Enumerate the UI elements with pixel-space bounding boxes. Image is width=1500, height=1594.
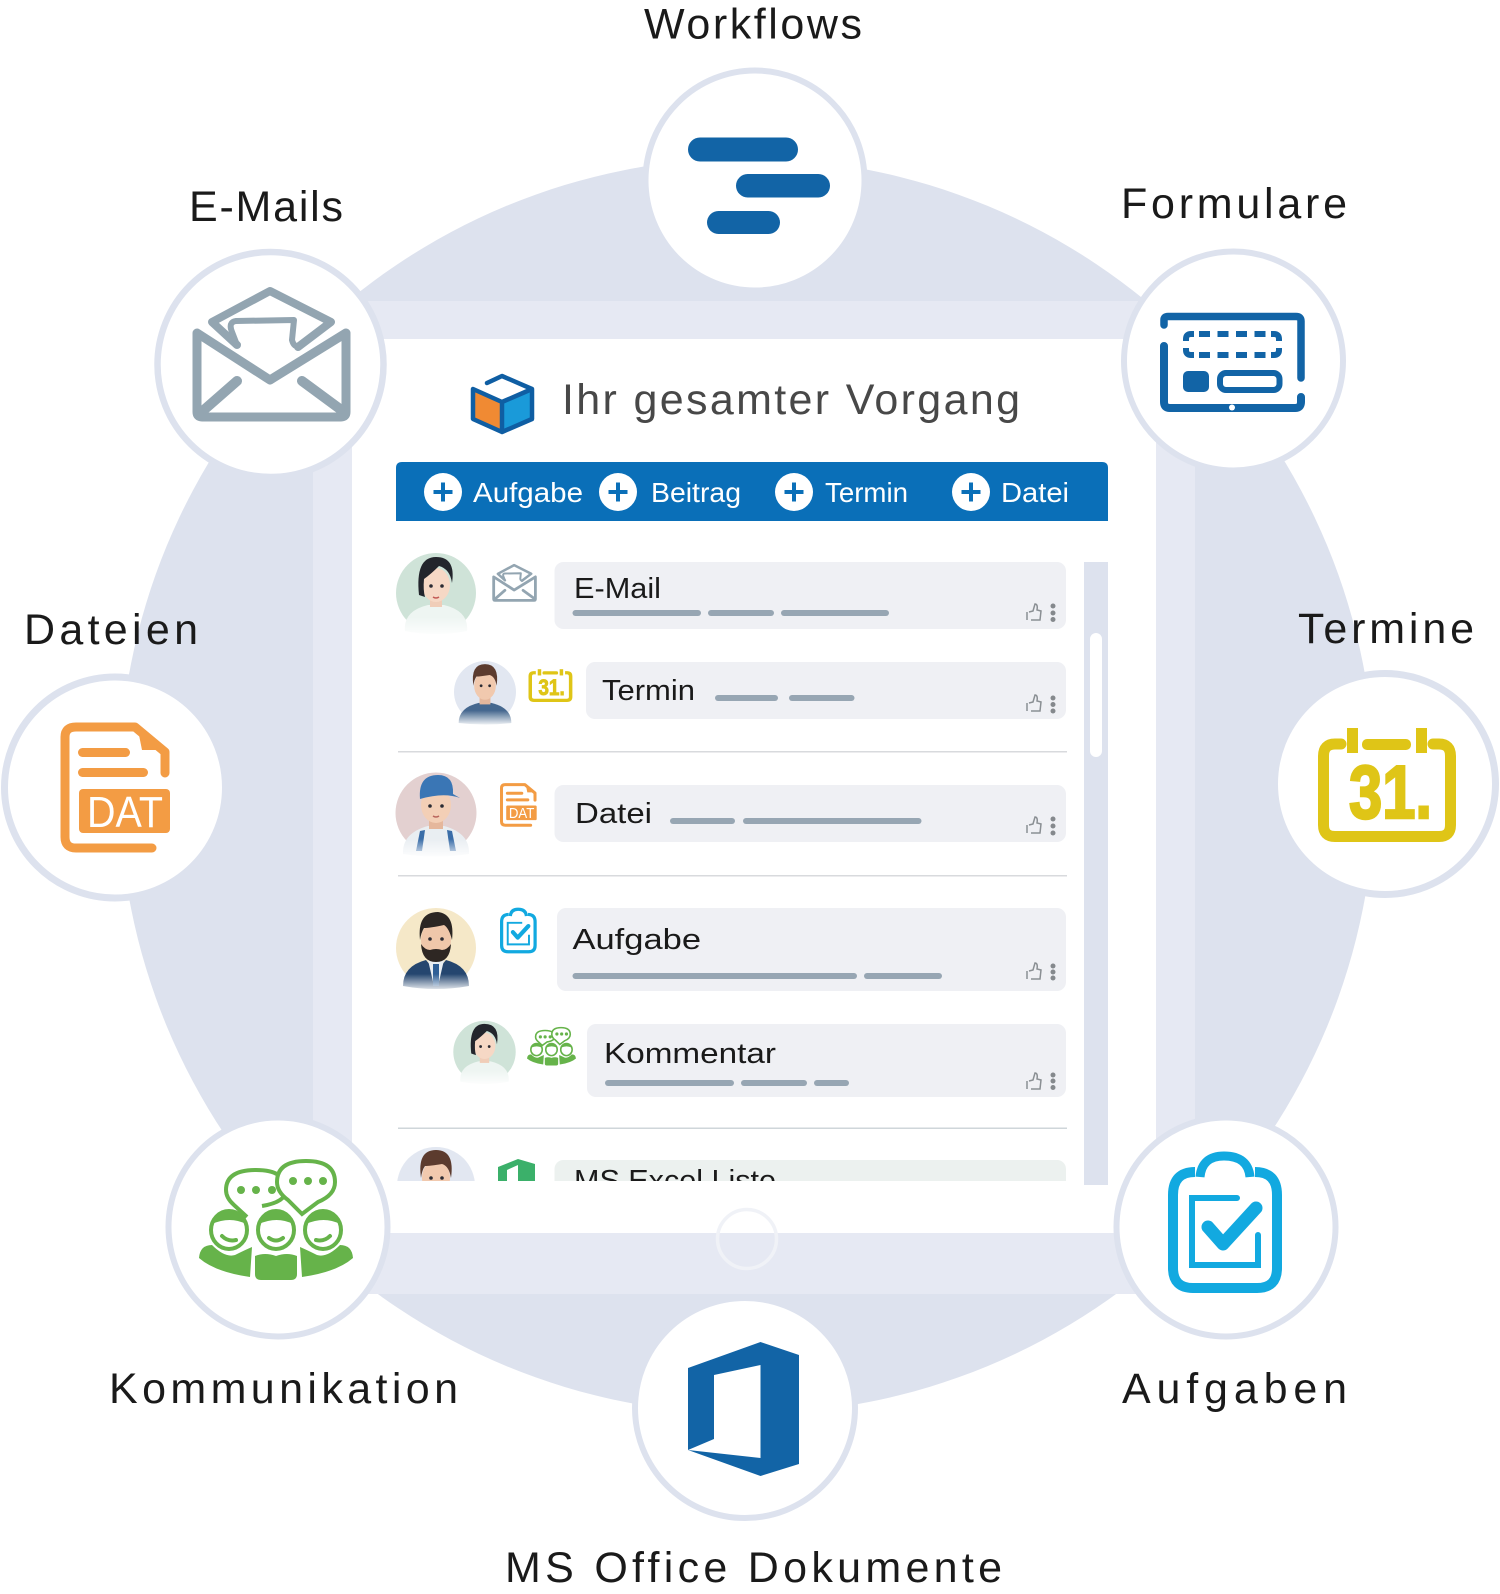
tablet device bbox=[313, 301, 1195, 1294]
button: Beitrag: Beitrag bbox=[651, 477, 741, 508]
icon: calendar: 31. bbox=[1349, 750, 1432, 834]
icon: DAT file: DAT bbox=[87, 788, 163, 837]
icon: thumb and menu bbox=[1027, 1072, 1056, 1090]
app heading bbox=[473, 376, 1020, 432]
satellite: E-Mails bbox=[158, 183, 384, 477]
icon: thumb and menu bbox=[1027, 604, 1056, 622]
placeholder bars bbox=[572, 973, 942, 979]
scrollbar bbox=[1084, 562, 1108, 1185]
tablet screen bbox=[352, 339, 1156, 1233]
feed row: E-Mail bbox=[394, 553, 1066, 637]
avatar: bearded man bbox=[394, 908, 478, 992]
circle bbox=[158, 252, 384, 477]
satellite: MS Office Dokumente bbox=[505, 1298, 1002, 1592]
icon: file small bbox=[502, 784, 537, 825]
label: Termine bbox=[1298, 605, 1474, 653]
feed row: Termin bbox=[452, 661, 1066, 726]
avatar: man bbox=[452, 661, 518, 726]
icon: calendar bbox=[1324, 728, 1450, 836]
feed row: Kommentar bbox=[452, 1021, 1066, 1097]
message label: MS Excel Liste bbox=[574, 1165, 776, 1197]
icon: e-mail small bbox=[494, 565, 535, 600]
circle bbox=[168, 1118, 388, 1336]
toolbar background bbox=[396, 462, 1108, 521]
satellite: Kommunikation bbox=[109, 1118, 458, 1413]
avatar: man with cap bbox=[394, 772, 478, 859]
message label: Kommentar bbox=[604, 1038, 776, 1070]
placeholder bars bbox=[715, 695, 854, 701]
label: Aufgaben bbox=[1122, 1365, 1347, 1413]
satellite: Workflows bbox=[644, 0, 864, 290]
button: Datei bbox=[952, 473, 1069, 511]
tablet frame bbox=[313, 301, 1195, 1294]
icon: form bbox=[1164, 316, 1301, 410]
circle bbox=[4, 677, 226, 898]
home button bbox=[718, 1210, 776, 1268]
message label: Termin bbox=[602, 675, 695, 707]
label: Dateien bbox=[24, 606, 198, 654]
placeholder bars bbox=[605, 1080, 849, 1086]
message label: E-Mail bbox=[574, 573, 661, 605]
toolbar bbox=[396, 462, 1108, 521]
label: E-Mails bbox=[189, 183, 343, 231]
message bubble bbox=[554, 785, 1066, 842]
message bubble bbox=[554, 1160, 1066, 1181]
placeholder bars bbox=[572, 610, 889, 616]
icon: communication small bbox=[527, 1028, 576, 1065]
label: Workflows bbox=[644, 0, 862, 48]
circle bbox=[1124, 252, 1343, 470]
circle bbox=[1116, 1118, 1336, 1336]
icon: clipboard check bbox=[1173, 1156, 1277, 1288]
background circle bbox=[119, 158, 1375, 1414]
avatar: woman bbox=[452, 1021, 517, 1086]
button: Aufgabe bbox=[424, 473, 583, 511]
satellite: Aufgaben bbox=[1116, 1118, 1347, 1413]
message bubble bbox=[586, 662, 1066, 719]
icon: calendar small: 31. bbox=[538, 675, 565, 700]
button: Aufgabe: Aufgabe bbox=[473, 477, 583, 508]
button: Beitrag bbox=[599, 473, 741, 511]
icon: task small bbox=[502, 909, 535, 952]
icon: workflow bars bbox=[688, 138, 830, 234]
icon: office logo bbox=[688, 1342, 799, 1476]
message bubble bbox=[587, 1024, 1066, 1097]
icon: thumb and menu bbox=[1027, 695, 1056, 714]
satellite: Termine bbox=[1274, 605, 1496, 894]
circle bbox=[1274, 674, 1496, 894]
label: MS Office Dokumente bbox=[505, 1544, 1002, 1592]
avatar: woman bbox=[394, 553, 478, 637]
feed row: Aufgabe bbox=[394, 908, 1066, 992]
icon: calendar small bbox=[530, 669, 571, 700]
circle bbox=[646, 70, 864, 290]
placeholder bars bbox=[670, 818, 922, 824]
feed row: Datei bbox=[394, 772, 1066, 859]
icon: open envelope bbox=[197, 291, 346, 417]
icon: thumb and menu bbox=[1027, 816, 1056, 836]
message bubble bbox=[554, 562, 1066, 629]
button: Datei: Datei bbox=[1001, 477, 1069, 508]
satellite: Dateien bbox=[4, 606, 226, 898]
message label: Datei bbox=[575, 798, 652, 830]
circle bbox=[635, 1298, 855, 1518]
icon: file small: DAT bbox=[509, 806, 534, 822]
feed row: MS Excel Liste (clipped) bbox=[398, 1147, 1066, 1181]
icon: DAT file bbox=[65, 725, 170, 848]
satellite: Formulare bbox=[1121, 180, 1347, 470]
button: Termin: Termin bbox=[825, 477, 908, 508]
title: Ihr gesamter Vorgang bbox=[562, 376, 1020, 424]
icon: thumb and menu bbox=[1027, 963, 1056, 980]
label: Kommunikation bbox=[109, 1365, 458, 1413]
message label: Aufgabe bbox=[572, 924, 701, 956]
icon: excel bbox=[498, 1159, 535, 1181]
avatar: man bbox=[398, 1147, 474, 1181]
message bubble bbox=[557, 908, 1066, 991]
icon: people with speech bubbles bbox=[199, 1161, 353, 1280]
label: Formulare bbox=[1121, 180, 1347, 228]
icon: cube logo bbox=[473, 376, 532, 432]
button: Termin bbox=[775, 473, 908, 511]
